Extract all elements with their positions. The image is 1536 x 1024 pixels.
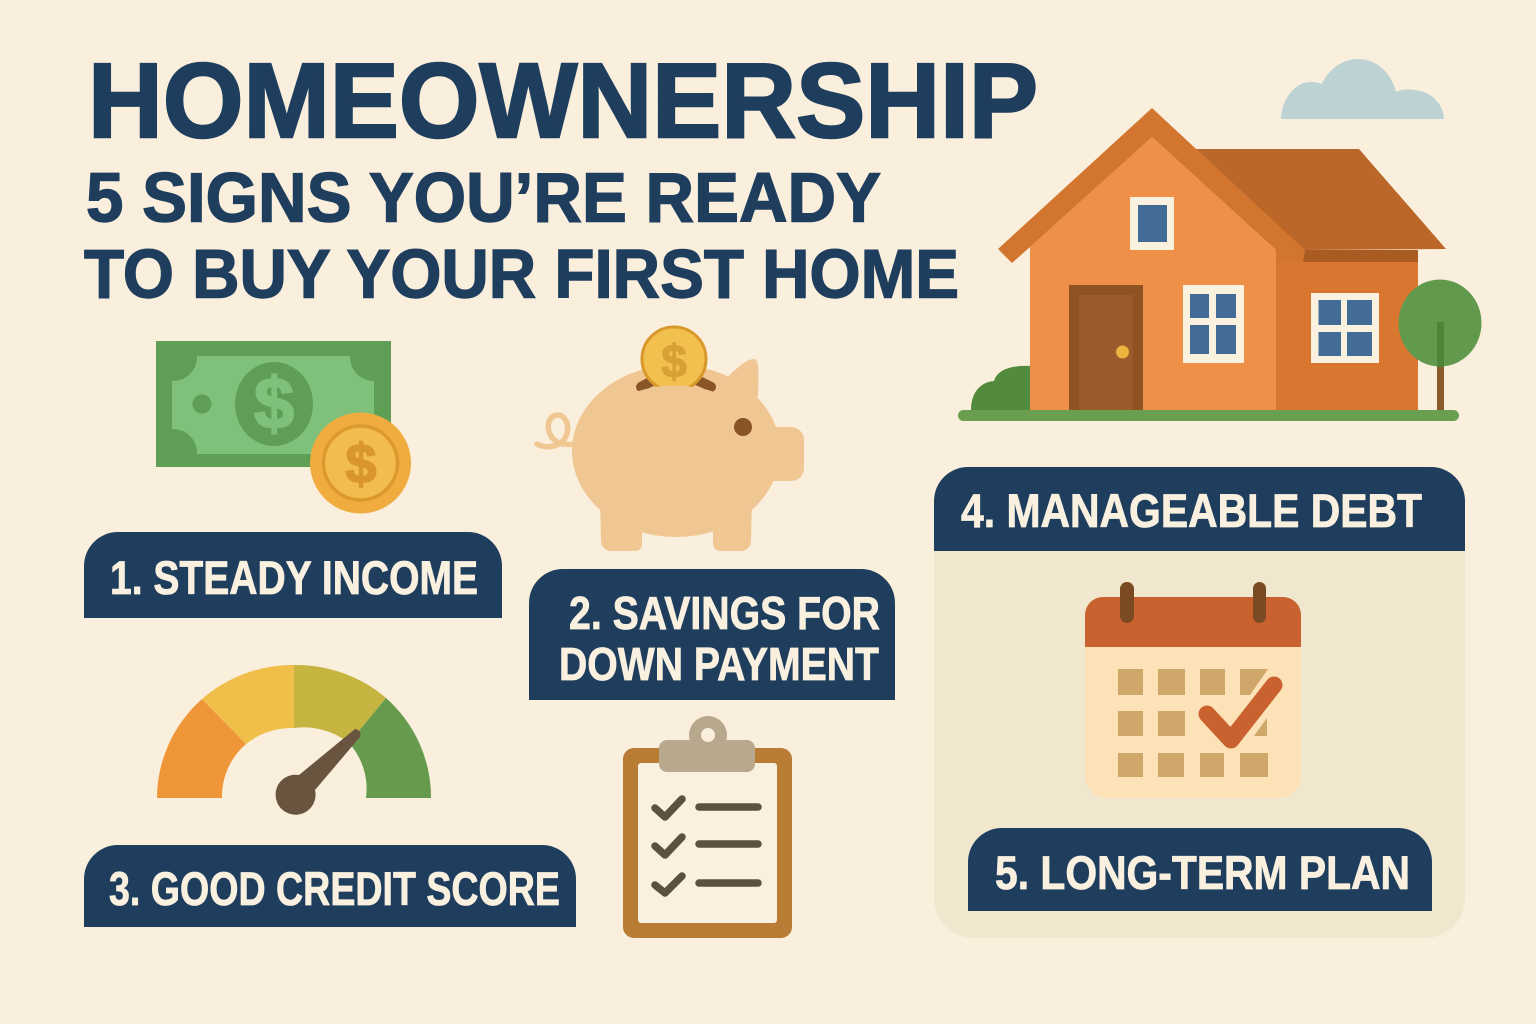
subtitle line 1: 5 SIGNS YOU’RE READY	[86, 158, 881, 236]
eye	[734, 418, 752, 436]
bush	[971, 366, 1030, 410]
coin	[310, 412, 411, 514]
bill	[156, 341, 391, 467]
front window	[1183, 285, 1244, 363]
door	[1069, 285, 1143, 410]
label: 2 savings for down payment	[529, 569, 895, 700]
right wing wall	[1276, 250, 1418, 410]
title	[84, 42, 1038, 312]
eave shadow	[1303, 250, 1418, 262]
label: 1 steady income: 1. STEADY INCOME	[110, 551, 478, 604]
orange segment	[157, 699, 246, 798]
icon: calendar	[1085, 582, 1301, 798]
label: 4 manageable debt: 4. MANAGEABLE DEBT	[961, 484, 1422, 537]
checks	[655, 799, 758, 893]
label: 2 savings for down payment: 2. SAVINGS FOR	[569, 587, 880, 639]
icon: house	[958, 108, 1482, 421]
slot lip	[632, 386, 718, 425]
label: 2 savings for down payment: DOWN PAYMENT	[559, 638, 879, 690]
icon: clipboard	[623, 716, 792, 938]
main wall	[1030, 137, 1276, 410]
icon: dollar bill with coin: $	[254, 364, 294, 444]
tail	[537, 415, 577, 447]
side window	[1311, 293, 1379, 363]
label: 3 good credit score	[84, 845, 576, 927]
clip	[689, 716, 727, 754]
label: 5 long-term plan: 5. LONG-TERM PLAN	[995, 846, 1410, 899]
legs	[600, 500, 642, 551]
icon: dollar bill with coin: $	[345, 432, 377, 495]
icon: piggy bank	[537, 327, 804, 551]
icon: cloud	[1281, 59, 1444, 119]
coin	[642, 327, 706, 391]
ear	[722, 359, 758, 412]
coin slot	[641, 376, 711, 387]
icon: credit score gauge	[157, 665, 431, 815]
ground	[958, 410, 1459, 421]
tree	[1437, 366, 1444, 410]
olive segment	[294, 665, 386, 743]
label: 4 manageable debt	[934, 467, 1465, 551]
snout	[760, 427, 804, 481]
gable roof	[998, 108, 1305, 263]
needle	[276, 729, 360, 815]
title line: homeownership: HOMEOWNERSHIP	[88, 42, 1038, 160]
label: 1 steady income	[84, 532, 502, 618]
subtitle line 2: TO BUY YOUR FIRST HOME	[84, 236, 959, 312]
icon: piggy bank: $	[661, 335, 687, 387]
yellow segment	[202, 665, 294, 744]
label: 3 good credit score: 3. GOOD CREDIT SCORE	[109, 862, 560, 915]
check mark	[1207, 685, 1274, 740]
body	[572, 365, 780, 537]
green segment	[349, 698, 431, 798]
date squares	[1118, 669, 1268, 777]
right wing roof	[1196, 149, 1446, 250]
panel: right column	[934, 467, 1465, 938]
icon: dollar bill with coin	[156, 341, 411, 514]
label: 5 long-term plan	[968, 828, 1432, 911]
attic window	[1130, 197, 1174, 250]
